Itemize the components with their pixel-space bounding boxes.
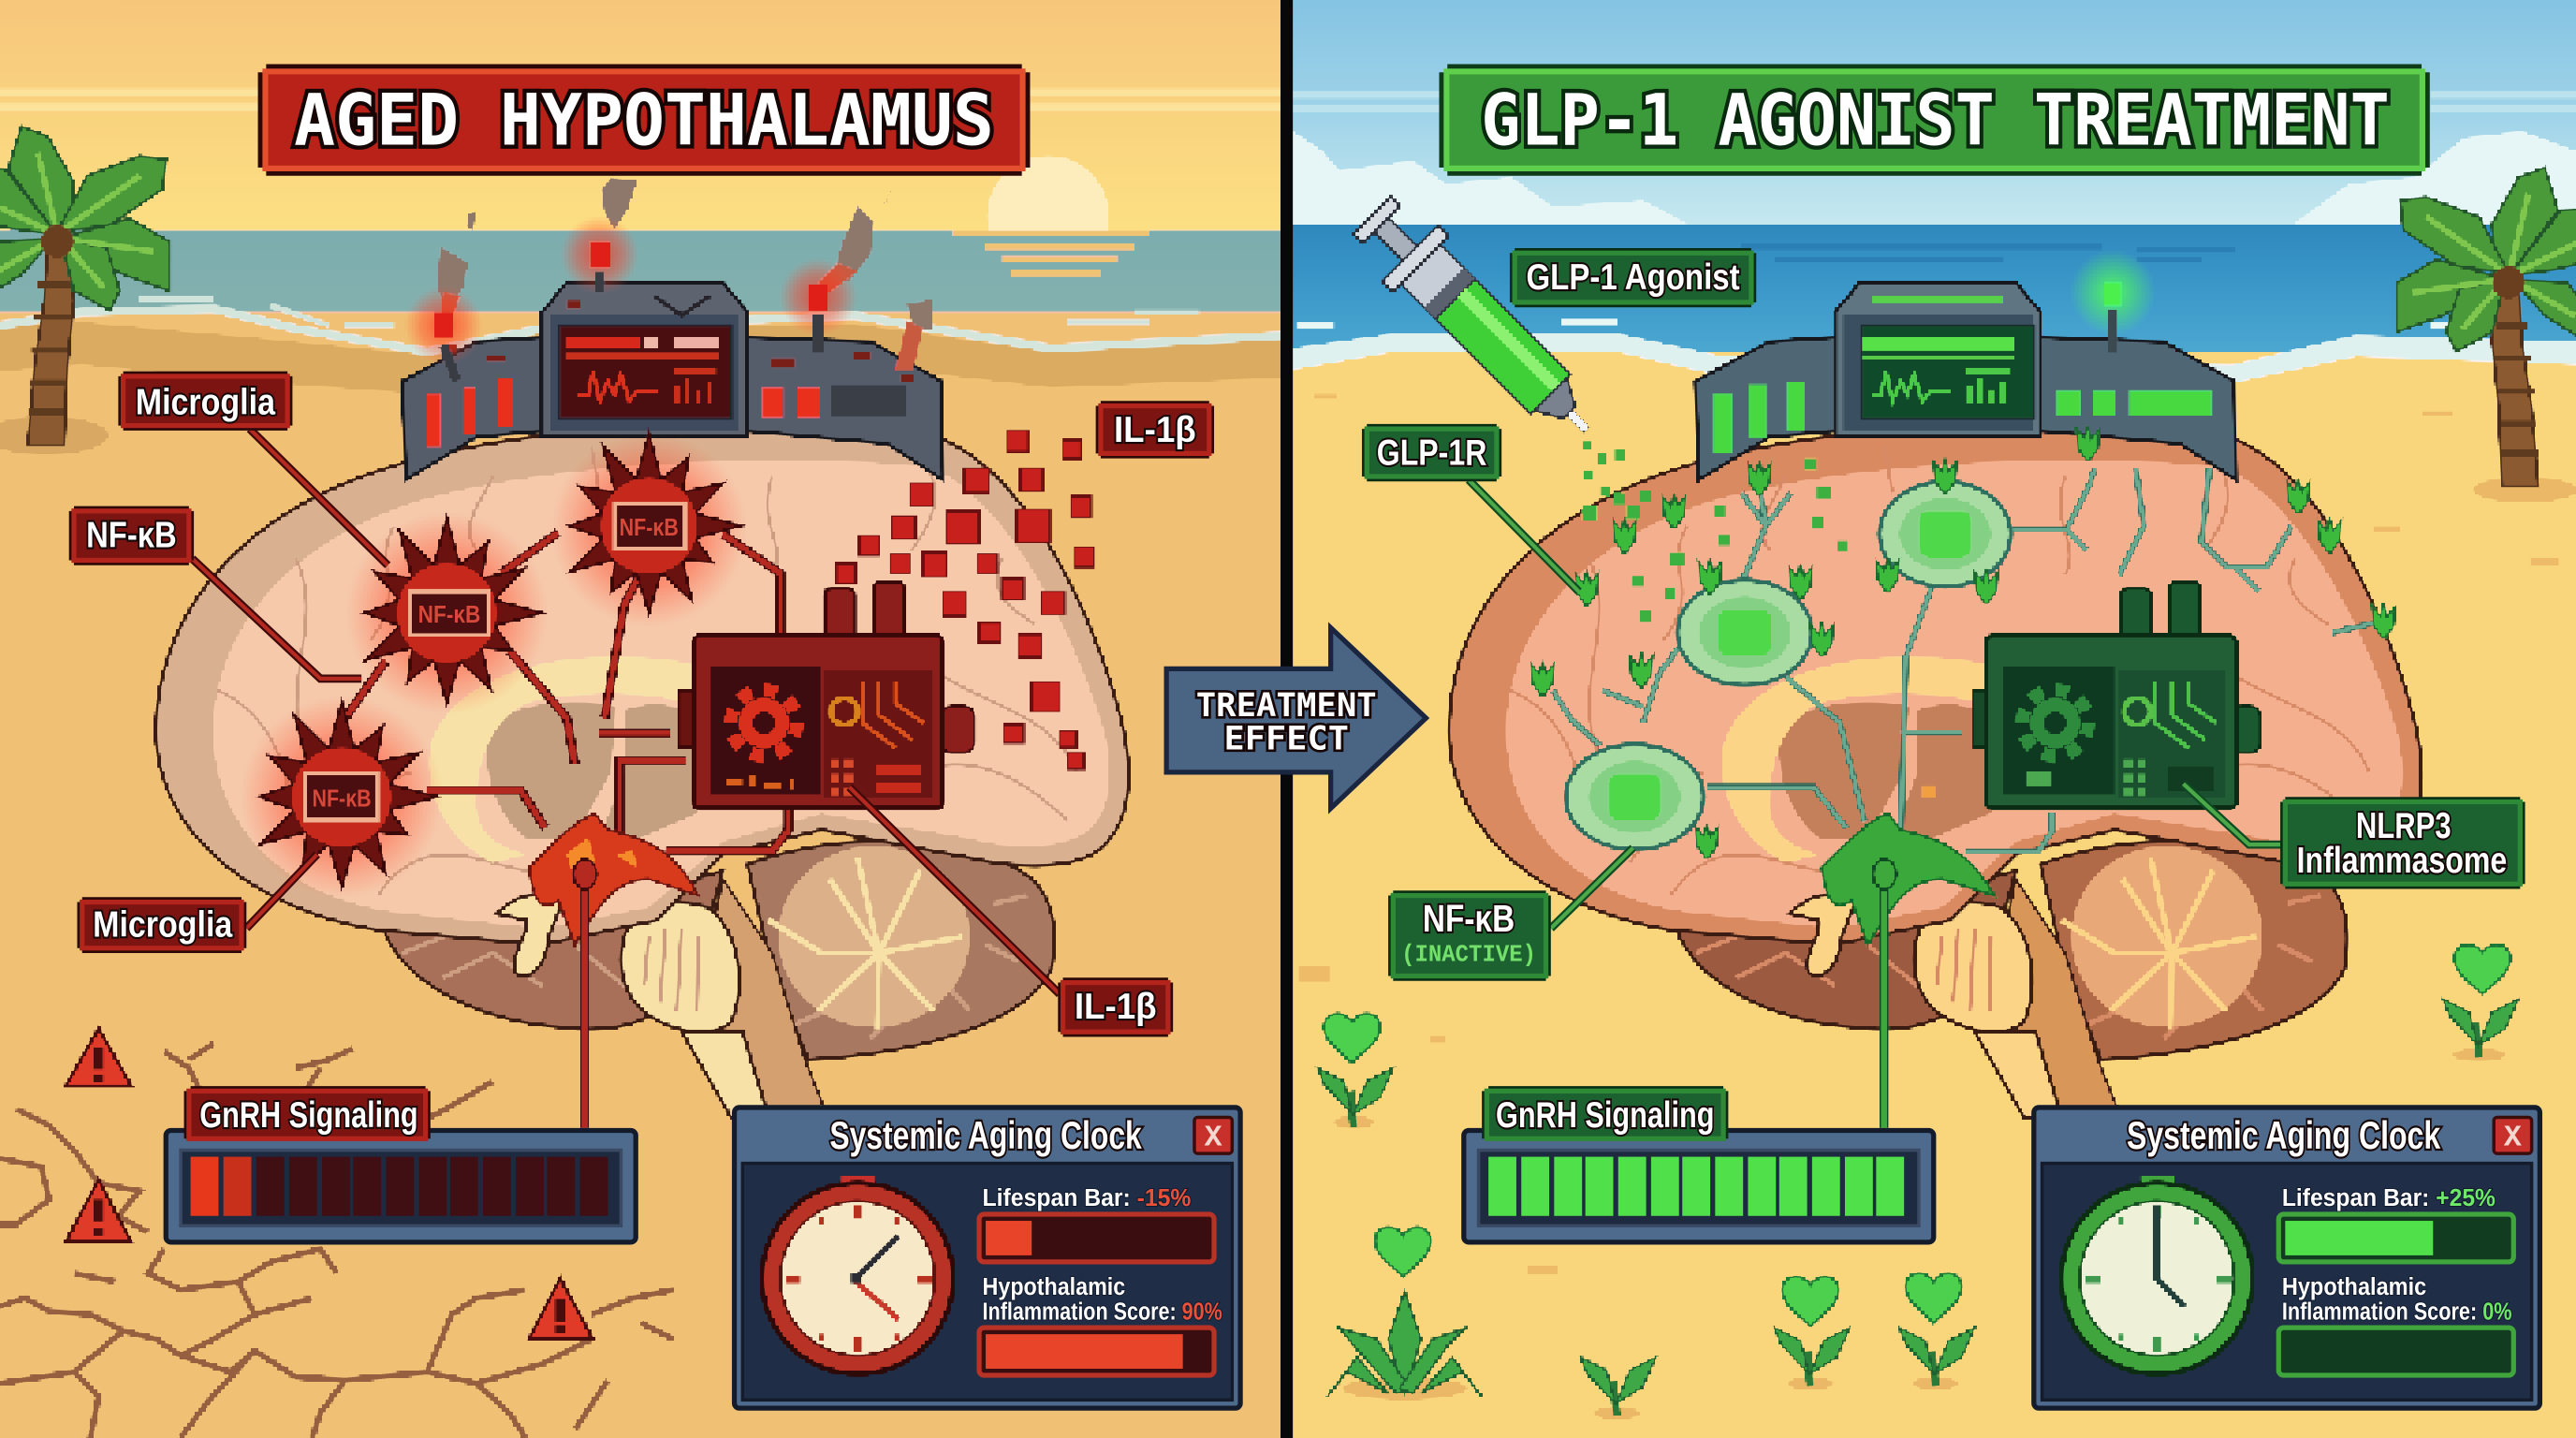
panel: left systemic aging clock: Systemic Aging Clock: [829, 1113, 1142, 1157]
right palm tree: [2397, 168, 2576, 487]
label: NLRP3 Inflammasome: Inflammasome: [2297, 841, 2507, 881]
IL-1β cytokine particles: [836, 431, 1094, 769]
label: NF-κB: [69, 506, 194, 565]
left inflammasome module: [679, 581, 974, 809]
label: NLRP3 Inflammasome: NLRP3: [2356, 806, 2452, 846]
panel: right systemic aging clock: Lifespan Bar: +25%: [2282, 1183, 2496, 1211]
syringe icon: [1344, 187, 1615, 458]
right microglia cells resting: [1566, 481, 2011, 849]
right neural branches: [1553, 468, 2382, 851]
right inflammasome module: [1973, 581, 2261, 809]
GLP-1 receptors and agonist particles: [1531, 426, 2395, 858]
label: NF-κB: NF-κB: [86, 515, 177, 555]
label: IL-1β lower: [1058, 977, 1173, 1036]
leader: GLP-1R: [1469, 479, 1579, 592]
right brain anatomy: [1449, 423, 2422, 1117]
panel: left systemic aging clock: [735, 1108, 1240, 1408]
panel: right systemic aging clock: Systemic Aging Clock: [2127, 1113, 2441, 1157]
panel: left systemic aging clock: X: [1205, 1122, 1222, 1154]
leader: NF-κB inactive: [1551, 848, 1633, 929]
left beach scene: [0, 0, 1284, 1438]
label: GLP-1R: GLP-1R: [1377, 433, 1486, 474]
arrow: treatment effect: EFFECT: [1224, 719, 1349, 757]
label: Microglia upper: Microglia: [136, 382, 275, 422]
left microglia cells: [259, 433, 741, 888]
leader: NLRP3: [2184, 784, 2284, 844]
leader highlights: [192, 429, 1060, 994]
panel: right systemic aging clock: [2034, 1108, 2539, 1408]
left desert cracks: [0, 1043, 674, 1438]
leader: Microglia lower: [246, 855, 317, 929]
icon: right clock: [2062, 1177, 2252, 1373]
left GnRH signaling meter: GnRH Signaling: [199, 1095, 418, 1136]
left wires: [345, 533, 788, 851]
title: GLP-1 agonist treatment: [1439, 64, 2430, 176]
warning triangles: [66, 1029, 593, 1339]
title: aged hypothalamus: [258, 64, 1030, 176]
cell text NF-κB 1: NF-κB: [418, 600, 480, 628]
icon: left clock: [762, 1177, 953, 1373]
title: GLP-1 agonist treatment: GLP-1 AGONIST TREATMENT: [1481, 79, 2390, 161]
right GnRH signaling meter: GnRH Signaling: [1496, 1095, 1714, 1136]
left hypothalamus inflamed: [529, 814, 698, 1129]
label: Microglia lower: [77, 897, 246, 953]
divider: [1281, 0, 1294, 1438]
label: NF-κB inactive: (INACTIVE): [1401, 941, 1536, 969]
label: NF-κB inactive: NF-κB: [1423, 897, 1515, 940]
label: IL-1β upper: IL-1β: [1114, 410, 1196, 450]
label: IL-1β upper: [1096, 401, 1214, 459]
arrow: treatment effect: [1166, 627, 1426, 809]
panel: right systemic aging clock: Inflammation Score: 0%: [2282, 1297, 2512, 1325]
label: GLP-1 Agonist: [1510, 248, 1756, 307]
right GnRH signaling meter: [1464, 1086, 1934, 1242]
leader: IL-1β lower: [849, 787, 1060, 994]
leader: Microglia upper: [250, 429, 388, 565]
left palm tree: [0, 126, 169, 455]
hearts and sprouts: [1318, 945, 2519, 1419]
panel: left systemic aging clock: Hypothalamic: [983, 1272, 1125, 1300]
label: NF-κB inactive: [1388, 890, 1551, 981]
title: aged hypothalamus: AGED HYPOTHALAMUS: [294, 79, 994, 161]
left GnRH signaling meter: [166, 1086, 636, 1242]
arrow: treatment effect: TREATMENT: [1196, 686, 1377, 725]
label: GLP-1 Agonist: GLP-1 Agonist: [1526, 257, 1740, 298]
panel: right systemic aging clock: Hypothalamic: [2282, 1272, 2426, 1300]
panel: right systemic aging clock: X: [2504, 1122, 2522, 1154]
left glows around microglia: [240, 431, 748, 899]
left machine on brain: [402, 283, 943, 479]
panel: left systemic aging clock: Lifespan Bar: -15%: [983, 1183, 1191, 1211]
label: Microglia upper: [118, 372, 292, 431]
left antennas and smoke: [404, 178, 933, 381]
label: GLP-1R: [1362, 424, 1501, 481]
right beach scene: [1293, 0, 2576, 1438]
leader: NF-κB: [192, 559, 361, 679]
right hypothalamus healthy: [1822, 785, 1995, 1129]
cell text NF-κB 3: NF-κB: [312, 785, 372, 813]
label: NLRP3 Inflammasome: [2280, 797, 2525, 889]
right machine on brain: [1695, 250, 2236, 479]
label: IL-1β lower: IL-1β: [1075, 987, 1157, 1027]
left brain anatomy: [156, 423, 1129, 1117]
cell text NF-κB 2: NF-κB: [620, 513, 679, 541]
green leader highlights: [1469, 479, 2284, 929]
panel: left systemic aging clock: Inflammation Score: 90%: [983, 1297, 1222, 1325]
label: Microglia lower: Microglia: [93, 904, 233, 945]
